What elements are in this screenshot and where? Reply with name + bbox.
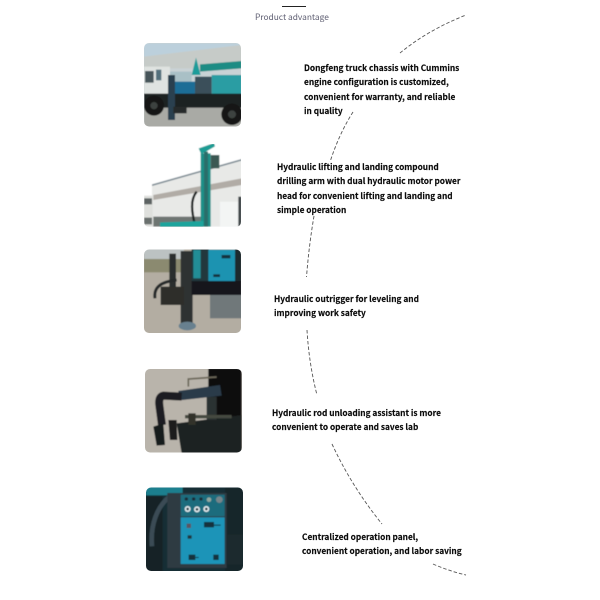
text: rod unloading: Hydraulic rod unloading assistant is more — [272, 407, 441, 419]
text: outrigger: improving work safety — [274, 307, 366, 319]
photo: drilling arm — [144, 144, 241, 227]
text: truck chassis: engine configuration is customized, — [304, 76, 449, 88]
text: truck chassis: in quality — [304, 105, 343, 117]
heading: Product advantage — [255, 11, 329, 23]
dashed arc 6 — [433, 564, 466, 575]
text: operation panel — [302, 531, 462, 557]
dashed arc 5 — [332, 444, 382, 524]
text: drilling arm: drilling arm with dual hydraulic motor power — [277, 175, 460, 187]
text: truck chassis: convenient for warranty, and reliable — [304, 91, 455, 103]
photo: operation panel — [146, 488, 243, 571]
text: truck chassis: Dongfeng truck chassis with Cummins — [304, 62, 459, 74]
photo: truck chassis — [144, 43, 241, 126]
text: truck chassis — [304, 62, 459, 117]
text: rod unloading: convenient to operate and saves lab — [272, 421, 418, 433]
text: rod unloading — [272, 407, 441, 433]
text: outrigger: Hydraulic outrigger for leveling and — [274, 293, 419, 305]
dashed arc 2 — [330, 112, 353, 162]
text: drilling arm: Hydraulic lifting and landing compound — [277, 161, 439, 173]
photo: rod unloading assistant — [145, 369, 242, 452]
text: drilling arm — [277, 161, 461, 216]
photo: hydraulic outrigger — [144, 250, 241, 333]
text: operation panel: Centralized operation panel, — [302, 531, 418, 543]
heading rule — [282, 6, 306, 7]
dashed arc 1 — [400, 15, 466, 53]
dashed arc 3 — [306, 216, 314, 277]
text: outrigger — [274, 293, 419, 319]
dashed arc 4 — [307, 330, 317, 395]
text: drilling arm: simple operation — [277, 204, 346, 216]
text: operation panel: convenient operation, and labor saving — [302, 545, 462, 557]
text: drilling arm: head for convenient lifting and landing and — [277, 190, 453, 202]
